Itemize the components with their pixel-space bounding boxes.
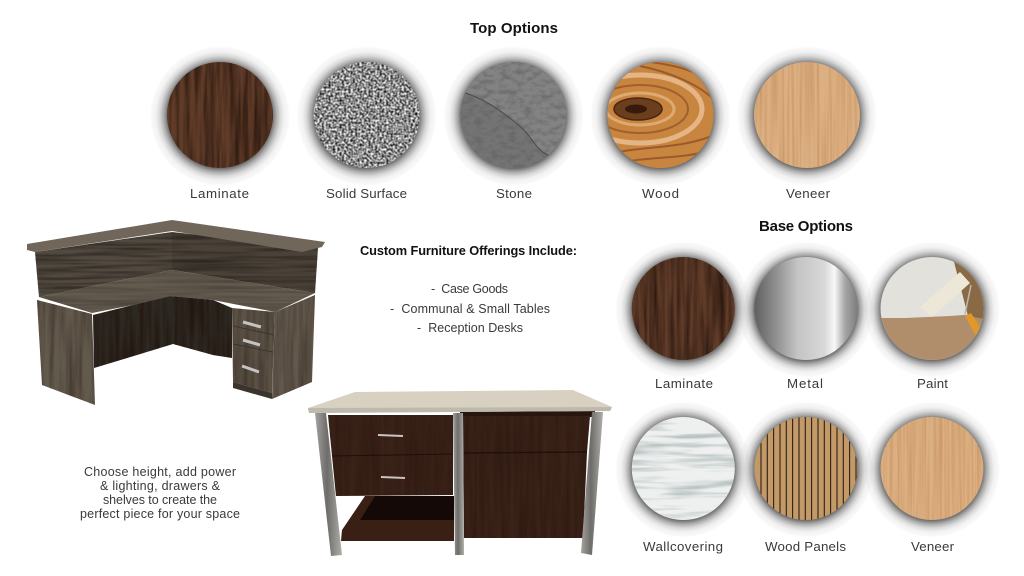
swatch: wood panels base (738, 402, 874, 554)
swatch: solid surface top: Solid Surface (326, 186, 407, 201)
desk work surface (39, 270, 315, 313)
swatch: veneer base: Veneer (911, 539, 955, 554)
swatch: wood panels base: Wood Panels (765, 539, 846, 554)
desk counter top shelf (27, 220, 325, 252)
swatch: wallcovering base: Wallcovering (643, 539, 723, 554)
offerings heading: Custom Furniture Offerings Include: (360, 243, 577, 258)
description text: Choose height, add power (84, 465, 236, 479)
panel: base options (615, 218, 1000, 554)
swatch: wallcovering base (615, 402, 751, 554)
island open shelf (341, 496, 454, 541)
swatch: veneer base (864, 402, 1000, 554)
swatch: stone top (444, 46, 584, 201)
desk right panel (272, 295, 315, 399)
swatch: laminate top: Laminate (190, 186, 249, 201)
desk back wall right (172, 232, 318, 293)
swatch: veneer top: Veneer (786, 186, 831, 201)
description text: perfect piece for your space (80, 507, 240, 521)
desk dark modesty panels (90, 294, 235, 370)
island wood drawers (326, 413, 456, 498)
swatch: metal base (738, 242, 874, 391)
island metal legs (315, 412, 603, 556)
heading: base options: Base Options (759, 218, 853, 235)
desk back wall left (35, 232, 172, 297)
desk left panel (37, 300, 95, 405)
offerings list (390, 282, 550, 335)
offerings list: - Communal & Small Tables (390, 302, 550, 316)
description text: & lighting, drawers & (100, 479, 221, 493)
heading: top options: Top Options (470, 20, 558, 37)
desk drawer pedestal (232, 308, 275, 399)
island countertop (308, 390, 612, 413)
swatch: wood top: Wood (642, 186, 679, 201)
offerings list: - Case Goods (431, 282, 508, 296)
island wood door and drawer (460, 411, 595, 540)
swatch: paint base: Paint (917, 376, 948, 391)
storage island (308, 390, 612, 556)
swatch: laminate base: Laminate (655, 376, 713, 391)
swatch: stone top: Stone (496, 186, 532, 201)
panel: top options (150, 20, 877, 201)
swatch: laminate top (150, 46, 290, 201)
offerings list: - Reception Desks (417, 321, 523, 335)
description text: shelves to create the (103, 493, 217, 507)
swatch: laminate base (615, 242, 751, 391)
reception desk (27, 220, 325, 408)
swatch: wood top (593, 48, 728, 198)
custom furniture offerings text (360, 243, 577, 335)
swatch: paint base (864, 242, 1000, 391)
description text (80, 465, 240, 521)
swatch: metal base: Metal (787, 376, 823, 391)
swatch: veneer top (737, 46, 877, 201)
swatch: solid surface top (297, 46, 437, 201)
